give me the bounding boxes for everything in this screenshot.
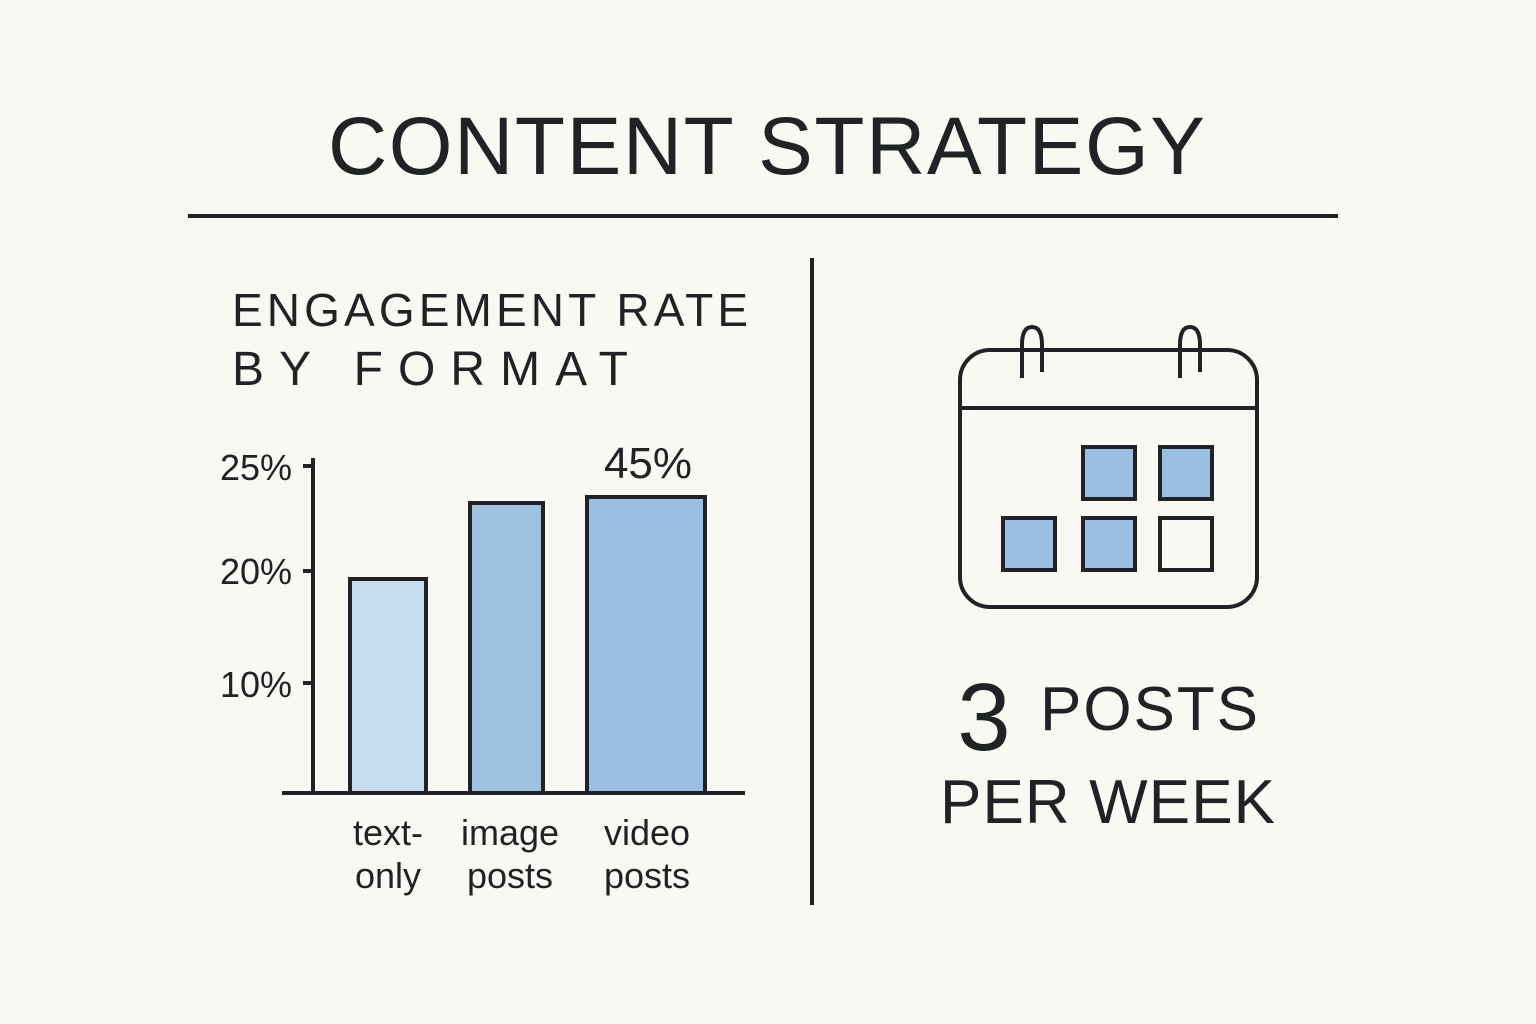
stat text: 3	[957, 664, 1011, 771]
icon: calendar	[960, 327, 1257, 607]
bar chart: only	[355, 855, 421, 896]
bar chart	[220, 439, 745, 896]
title: CONTENT STRATEGY	[328, 101, 1205, 192]
chart heading: BY FORMAT	[232, 343, 628, 396]
chart heading	[232, 284, 748, 396]
bar chart: 10%	[220, 664, 292, 705]
stat text: PER WEEK	[940, 768, 1275, 837]
bar chart: text-	[353, 812, 423, 853]
stat text: POSTS	[1040, 675, 1258, 744]
bar chart: 25%	[220, 447, 292, 488]
bar chart: image	[461, 812, 559, 853]
bar chart: posts	[467, 855, 553, 896]
bar chart: 20%	[220, 551, 292, 592]
panel: posting frequency	[940, 327, 1275, 837]
bar chart: posts	[604, 855, 690, 896]
chart heading: ENGAGEMENT RATE	[232, 284, 748, 336]
panel: engagement chart	[220, 284, 748, 896]
bar chart: video	[604, 812, 690, 853]
bar chart: 45%	[604, 439, 692, 488]
stat text	[940, 664, 1275, 837]
